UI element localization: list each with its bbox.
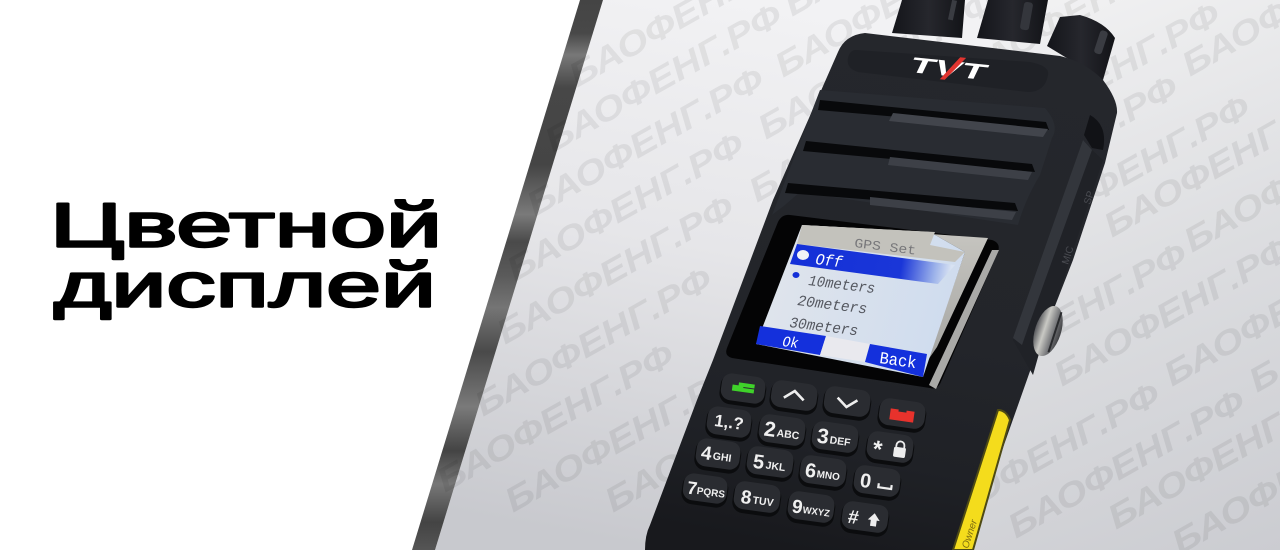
title — [50, 192, 442, 320]
key: 7 — [680, 472, 730, 509]
key: 0: 0 — [858, 470, 873, 493]
key: 8: 8 — [739, 487, 753, 509]
watermark pattern: БАОФЕНГ.РФ — [943, 235, 1194, 399]
knobs — [892, 0, 1115, 80]
key: 3: DEF — [829, 434, 852, 449]
watermark pattern: БАОФЕНГ.РФ — [598, 356, 849, 520]
watermark pattern: БАОФЕНГ.РФ — [520, 60, 771, 224]
watermark pattern: БАОФЕНГ.РФ — [1047, 230, 1280, 394]
side panel — [1013, 115, 1104, 375]
key: 6 — [797, 454, 849, 492]
panel: grey right background — [435, 0, 1280, 550]
key: hash — [839, 500, 891, 538]
key: 7: 7 — [686, 478, 698, 499]
glass frame — [802, 225, 988, 360]
key: 2: 2 — [763, 418, 777, 442]
key: 2 — [756, 413, 808, 451]
key: 4: 4 — [700, 443, 713, 465]
screen bezel — [726, 215, 999, 388]
speaker grille area — [772, 90, 1055, 225]
watermark pattern: БАОФЕНГ.РФ — [742, 46, 993, 210]
key: hash: # — [846, 507, 860, 529]
side screw — [1028, 302, 1068, 360]
key: 5: JKL — [765, 459, 787, 474]
key: star lock: * — [871, 436, 884, 464]
key: 9 — [785, 490, 837, 528]
key: 1 — [704, 405, 754, 443]
lcd text: Back — [878, 350, 917, 374]
lcd text: Off — [814, 251, 844, 272]
lcd text: 20meters — [796, 293, 868, 318]
key: 5: 5 — [751, 451, 766, 474]
key: 2: ABC — [776, 427, 800, 442]
key: 7: PQRS — [696, 486, 726, 501]
key: end — [876, 397, 928, 434]
selected row — [790, 244, 955, 284]
key: call — [718, 372, 768, 409]
key: 6: MNO — [816, 469, 841, 483]
key: down — [821, 385, 873, 422]
keypad — [680, 372, 928, 538]
watermark pattern: БАОФЕНГ.РФ — [976, 0, 1227, 159]
side panel: MIC — [1060, 245, 1077, 266]
radio handset — [645, 0, 1117, 550]
TVT logo: TVT — [909, 52, 990, 85]
lcd text: 10meters — [807, 273, 876, 298]
key: 8 — [731, 480, 783, 518]
watermark pattern: БАОФЕНГ.РФ — [430, 336, 681, 500]
display — [726, 215, 999, 389]
key: 6: 6 — [804, 460, 818, 483]
watermark pattern: БАОФЕНГ.РФ — [916, 375, 1167, 539]
watermark pattern: БАОФЕНГ.РФ — [468, 260, 719, 424]
key: up — [768, 379, 820, 416]
title: Цветной — [50, 192, 442, 260]
key: 8: TUV — [752, 494, 774, 509]
watermark pattern: БАОФЕНГ.РФ — [1006, 88, 1257, 252]
lcd text: Ok — [781, 334, 799, 353]
yellow strip — [953, 410, 1010, 550]
softkey bar — [756, 326, 927, 377]
lcd background — [756, 225, 965, 377]
key: 1: 1,.? — [713, 411, 745, 434]
watermark pattern: БАОФЕНГ.РФ — [934, 68, 1185, 232]
key: 5 — [744, 445, 796, 483]
key: star lock — [864, 430, 916, 468]
lcd text: 30meters — [788, 315, 859, 340]
key: 0 — [851, 464, 903, 502]
watermark pattern: БАОФЕНГ.РФ — [490, 188, 741, 352]
phone body — [645, 33, 1117, 550]
slanted dark band — [412, 0, 603, 550]
side panel: SP — [1082, 190, 1097, 206]
lcd text — [781, 236, 917, 374]
watermark pattern: БАОФЕНГ.РФ — [498, 356, 749, 520]
watermark pattern: БАОФЕНГ.РФ — [1001, 382, 1252, 546]
watermark pattern: БАОФЕНГ.РФ — [751, 0, 1002, 147]
key: 4: GHI — [712, 450, 732, 465]
speaker grooves — [785, 100, 1049, 220]
key: 9: 9 — [791, 496, 804, 519]
key: 3: 3 — [816, 425, 830, 449]
watermark pattern — [430, 0, 1280, 550]
watermark pattern: БАОФЕНГ.РФ — [500, 125, 751, 289]
title: дисплей — [54, 252, 436, 320]
logo plate — [848, 50, 1048, 92]
key: 9: WXYZ — [802, 505, 831, 520]
yellow strip: Owner — [960, 518, 980, 550]
key: 4 — [693, 437, 743, 475]
TVT logo — [909, 52, 990, 85]
watermark pattern: БАОФЕНГ.РФ — [538, 0, 789, 160]
lcd text: GPS Set — [854, 236, 917, 259]
key: 3 — [809, 420, 861, 458]
